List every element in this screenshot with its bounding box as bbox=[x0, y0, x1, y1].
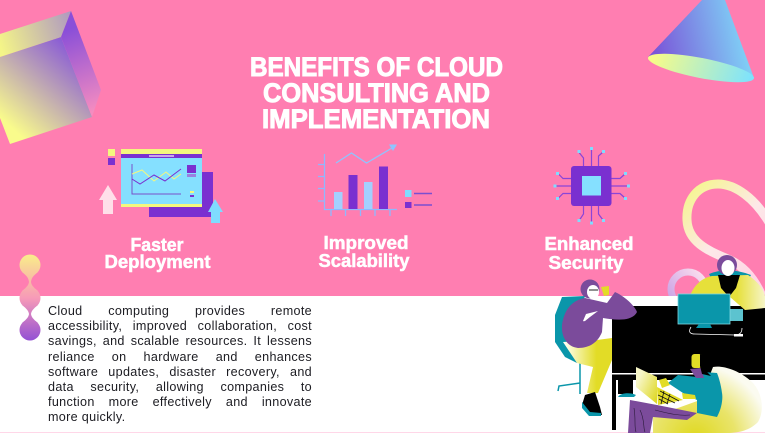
title: IMPLEMENTATION bbox=[262, 104, 490, 134]
title bbox=[250, 52, 503, 134]
desk bbox=[612, 306, 765, 430]
pink header background bbox=[0, 0, 765, 296]
heading: Enhanced Security: Enhanced bbox=[544, 234, 634, 254]
heading: Faster Deployment bbox=[104, 235, 210, 272]
body paragraph: reliance on hardware and enhances bbox=[48, 350, 312, 364]
heading: Improved Scalability bbox=[318, 233, 410, 271]
decorative cube bbox=[0, 11, 101, 144]
decorative cone bbox=[646, 0, 756, 88]
heading: Faster Deployment: Faster bbox=[130, 235, 184, 255]
illustration: people working at a desk bbox=[555, 255, 765, 433]
title: CONSULTING AND bbox=[263, 78, 490, 108]
body paragraph: software updates, disaster recovery, and bbox=[48, 365, 312, 379]
body paragraph bbox=[48, 304, 312, 424]
icon: bar chart with rising arrow bbox=[318, 144, 432, 216]
decorative three-lobed marker bbox=[20, 254, 40, 340]
title: BENEFITS OF CLOUD bbox=[250, 52, 503, 82]
icon: microchip bbox=[554, 147, 630, 224]
heading: Improved Scalability: Scalability bbox=[318, 251, 410, 271]
body paragraph: more quickly. bbox=[48, 410, 125, 424]
heading: Faster Deployment: Deployment bbox=[104, 252, 210, 272]
person on phone bbox=[555, 280, 637, 416]
body paragraph: Cloud computing provides remote bbox=[48, 304, 312, 318]
person at monitor bbox=[678, 255, 765, 336]
body paragraph: savings, and scalable resources. It lessens bbox=[48, 334, 312, 348]
body paragraph: data security, allowing companies to bbox=[48, 380, 312, 394]
person on bean bag with laptop bbox=[628, 354, 762, 433]
icon: dashboard window with arrows bbox=[99, 149, 223, 223]
bottom accent line bbox=[0, 432, 765, 433]
heading: Enhanced Security bbox=[544, 234, 634, 273]
heading: Enhanced Security: Security bbox=[548, 253, 624, 273]
heading: Improved Scalability: Improved bbox=[324, 233, 408, 253]
decorative swirl and ring bbox=[671, 184, 765, 306]
body paragraph: function more effectively and innovate bbox=[48, 395, 312, 409]
body paragraph: accessibility, improved collaboration, cost bbox=[48, 319, 312, 333]
